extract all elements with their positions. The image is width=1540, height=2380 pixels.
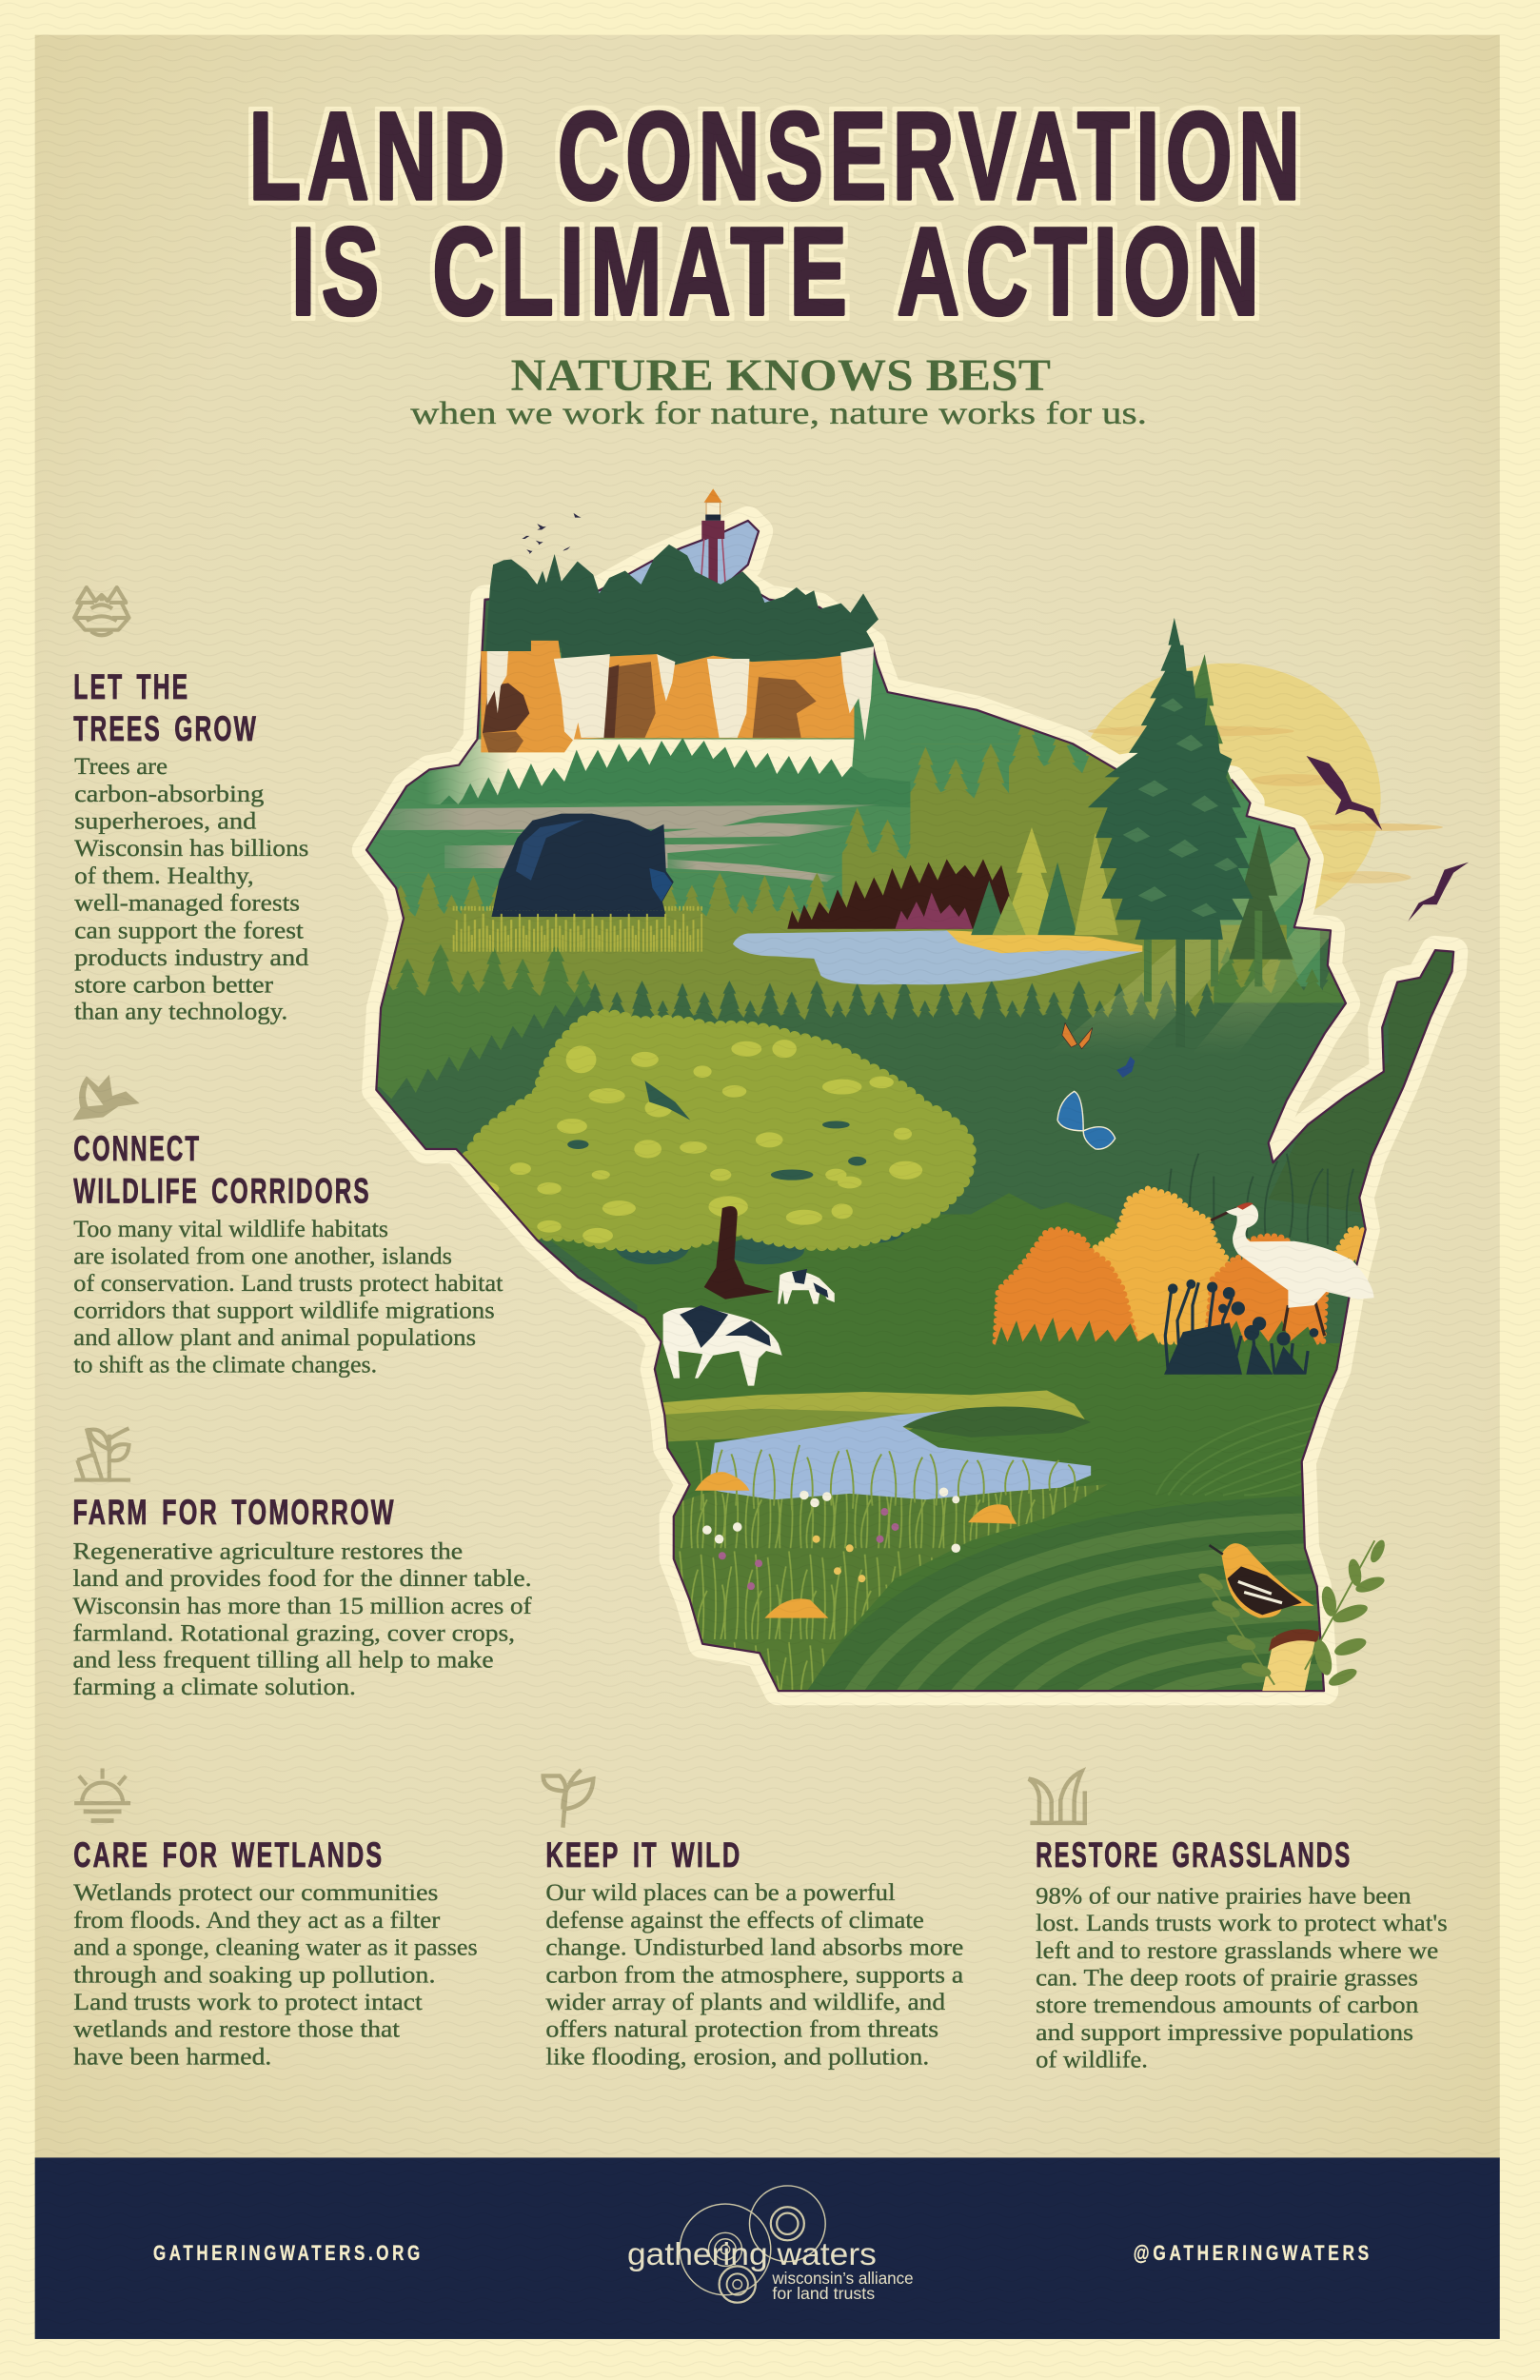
gathering waters logo	[627, 2186, 914, 2303]
body: care for wetlands: through and soaking up pollution.	[73, 1960, 436, 1988]
grey mist bands	[376, 804, 880, 882]
heading: let the trees grow: TREES GROW	[73, 709, 258, 748]
gathering waters logo: for land trusts	[772, 2284, 875, 2303]
oak sprigs	[1196, 1538, 1388, 1689]
striped farm field	[807, 1495, 1343, 1708]
icon: grass tufts	[1029, 1772, 1085, 1823]
crane	[1211, 1202, 1374, 1336]
body: restore grasslands: left and to restore grasslands where we	[1036, 1936, 1438, 1964]
social handle: @GATHERINGWATERS	[1134, 2241, 1372, 2265]
body: farm for tomorrow: farming a climate solution.	[73, 1673, 356, 1700]
subtitle: when we work for nature, nature works for us.	[410, 396, 1147, 431]
body: farm for tomorrow: Regenerative agriculture restores the	[73, 1537, 463, 1564]
body: restore grasslands: can. The deep roots of prairie grasses	[1036, 1963, 1418, 1991]
map halo	[366, 521, 1453, 1691]
door peninsula	[1269, 952, 1452, 1213]
heading: connect wildlife corridors: WILDLIFE CORRIDORS	[73, 1171, 371, 1210]
body: care for wetlands	[73, 1878, 478, 2070]
section: restore grasslands	[1029, 1772, 1448, 2073]
body: keep it wild: change. Undisturbed land absorbs more	[545, 1934, 963, 1961]
moss forest left	[377, 944, 594, 1099]
northern forest	[485, 545, 879, 666]
darker right tree	[1229, 824, 1293, 960]
sun rays	[1072, 840, 1330, 1040]
body: restore grasslands: lost. Lands trusts work to protect what's	[1036, 1909, 1448, 1936]
navy butterfly	[1116, 1057, 1135, 1078]
tall pine	[1088, 618, 1254, 940]
sun	[1075, 664, 1443, 934]
body: keep it wild: defense against the effects of climate	[545, 1906, 924, 1934]
canopy	[453, 1016, 970, 1247]
forest right rising	[1214, 947, 1344, 1021]
body: keep it wild: wider array of plants and wildlife, and	[545, 1988, 945, 2015]
body: let the trees grow: carbon-absorbing	[74, 780, 265, 807]
body: farm for tomorrow	[73, 1537, 532, 1700]
heading: keep it wild: KEEP IT WILD	[545, 1835, 742, 1874]
descending treeline left	[377, 996, 592, 1154]
body: let the trees grow: than any technology.	[74, 998, 287, 1025]
title	[248, 87, 1307, 341]
body: let the trees grow: store carbon better	[74, 971, 273, 999]
lighthouse	[701, 488, 725, 583]
heading: connect wildlife corridors	[73, 1129, 371, 1210]
body: let the trees grow: superheroes, and	[74, 807, 257, 835]
map scene clipped to Wisconsin	[349, 516, 1471, 1731]
body: care for wetlands: wetlands and restore those that	[73, 2015, 400, 2043]
website: GATHERINGWATERS.ORG	[153, 2241, 424, 2265]
lake superior bay	[599, 522, 771, 603]
section: farm for tomorrow	[73, 1428, 532, 1700]
section: connect wildlife corridors	[73, 1075, 503, 1378]
yellow green conifers	[971, 827, 1118, 935]
maroon trees	[896, 893, 973, 929]
black bear	[491, 814, 674, 917]
body: care for wetlands: have been harmed.	[73, 2042, 271, 2070]
gathering waters logo: gathering waters	[627, 2237, 877, 2272]
body: restore grasslands: store tremendous amounts of carbon	[1036, 1991, 1419, 2018]
dark wildflower clusters	[1165, 1280, 1317, 1374]
body: let the trees grow: products industry and	[74, 943, 309, 971]
prairie meadow	[667, 1484, 1108, 1691]
section: care for wetlands	[73, 1768, 478, 2070]
orange butterfly	[1062, 1023, 1093, 1049]
forest treeline	[590, 981, 1214, 1082]
icon: sunrise over water	[74, 1768, 130, 1820]
blue butterfly	[1057, 1091, 1116, 1149]
second pine	[1168, 654, 1235, 789]
body: keep it wild: carbon from the atmosphere, supports a	[545, 1960, 963, 1988]
body: let the trees grow	[74, 752, 309, 1025]
body: restore grasslands: 98% of our native prairies have been	[1036, 1881, 1412, 1909]
body: let the trees grow: Trees are	[74, 752, 168, 780]
icon: shovel and sprout	[74, 1428, 130, 1480]
body: connect wildlife corridors: of conservation. Land trusts protect habitat	[73, 1269, 503, 1297]
grass blades over river	[697, 1442, 1075, 1510]
body: farm for tomorrow: Wisconsin has more than 15 million acres of	[73, 1592, 532, 1619]
section: keep it wild	[543, 1770, 963, 2070]
body: farm for tomorrow: land and provides food for the dinner table.	[73, 1564, 532, 1592]
heading: let the trees grow: LET THE	[73, 667, 189, 706]
oak tree	[453, 1016, 970, 1299]
canopy highlights	[460, 1040, 922, 1243]
body: connect wildlife corridors	[73, 1215, 503, 1378]
body: keep it wild: Our wild places can be a powerful	[545, 1878, 896, 1906]
lakeside dark trees	[787, 859, 1014, 929]
heading: restore grasslands: RESTORE GRASSLANDS	[1036, 1835, 1352, 1874]
subtitle: NATURE KNOWS BEST	[511, 350, 1051, 401]
body: keep it wild: like flooding, erosion, and pollution.	[545, 2042, 929, 2070]
river	[708, 1410, 1091, 1512]
section: let the trees grow	[73, 587, 309, 1025]
body: keep it wild	[545, 1878, 963, 2070]
body: care for wetlands: Wetlands protect our communities	[73, 1878, 438, 1906]
body: restore grasslands	[1036, 1881, 1448, 2073]
light green hill	[349, 653, 1320, 986]
tree trunks	[1144, 911, 1262, 1047]
icon: seedling	[543, 1770, 593, 1828]
map outline	[366, 521, 1453, 1691]
heading: let the trees grow	[73, 667, 258, 748]
body: restore grasslands: and support impressive populations	[1036, 2018, 1413, 2046]
meadow flowers	[695, 1472, 1017, 1618]
shadow under canopy	[470, 1211, 906, 1264]
small cow	[778, 1269, 835, 1304]
body: care for wetlands: Land trusts work to protect intact	[73, 1988, 423, 2015]
small birds flock	[522, 513, 582, 554]
gathering waters logo: wisconsin’s alliance	[771, 2269, 914, 2288]
cream strip beneath cliffs	[424, 739, 854, 804]
icon: bird	[73, 1075, 140, 1121]
subtitle	[410, 350, 1147, 431]
pond bank	[661, 1390, 1085, 1442]
body: let the trees grow: Wisconsin has billions	[74, 834, 308, 862]
body: let the trees grow: of them. Healthy,	[74, 862, 254, 889]
footer band	[35, 2157, 1500, 2339]
body: connect wildlife corridors: to shift as the climate changes.	[73, 1351, 377, 1378]
marsh grass	[1168, 1154, 1354, 1245]
body: care for wetlands: and a sponge, cleaning water as it passes	[73, 1934, 478, 1961]
reed grass	[452, 906, 702, 952]
large cow	[663, 1305, 782, 1386]
body: connect wildlife corridors: are isolated from one another, islands	[73, 1241, 452, 1269]
meadow ground	[550, 1194, 1340, 1651]
grass fringe along shrubs	[996, 1318, 1317, 1348]
treeline on the hill	[440, 738, 910, 807]
autumn shrubs	[996, 1188, 1366, 1341]
body: let the trees grow: well-managed forests	[74, 889, 300, 917]
heading: care for wetlands: CARE FOR WETLANDS	[73, 1835, 384, 1874]
body: connect wildlife corridors: corridors that support wildlife migrations	[73, 1297, 495, 1324]
body: let the trees grow: can support the forest	[74, 916, 304, 943]
body: keep it wild: offers natural protection from threats	[545, 2015, 938, 2043]
sandstone cliffs	[481, 641, 874, 752]
far bank	[902, 1407, 1091, 1438]
lake	[733, 930, 1142, 984]
olive forest	[385, 727, 1287, 1021]
heading: connect wildlife corridors: CONNECT	[73, 1129, 201, 1168]
second bird	[1408, 863, 1469, 922]
icon: pine cones	[74, 587, 128, 635]
body: farm for tomorrow: and less frequent tilling all help to make	[73, 1645, 494, 1673]
warbler on stump	[1209, 1543, 1320, 1691]
large bird	[1307, 756, 1382, 830]
heading: farm for tomorrow: FARM FOR TOMORROW	[73, 1493, 396, 1532]
body: connect wildlife corridors: and allow plant and animal populations	[73, 1323, 476, 1351]
canopy gaps	[567, 1081, 866, 1180]
oak trunk	[704, 1206, 774, 1299]
furrows	[1156, 1404, 1320, 1495]
body: care for wetlands: from floods. And they act as a filter	[73, 1906, 441, 1934]
reed grass foreground	[470, 911, 682, 947]
body: connect wildlife corridors: Too many vital wildlife habitats	[73, 1215, 388, 1242]
body: farm for tomorrow: farmland. Rotational grazing, cover crops,	[73, 1619, 515, 1647]
body: restore grasslands: of wildlife.	[1036, 2046, 1148, 2073]
